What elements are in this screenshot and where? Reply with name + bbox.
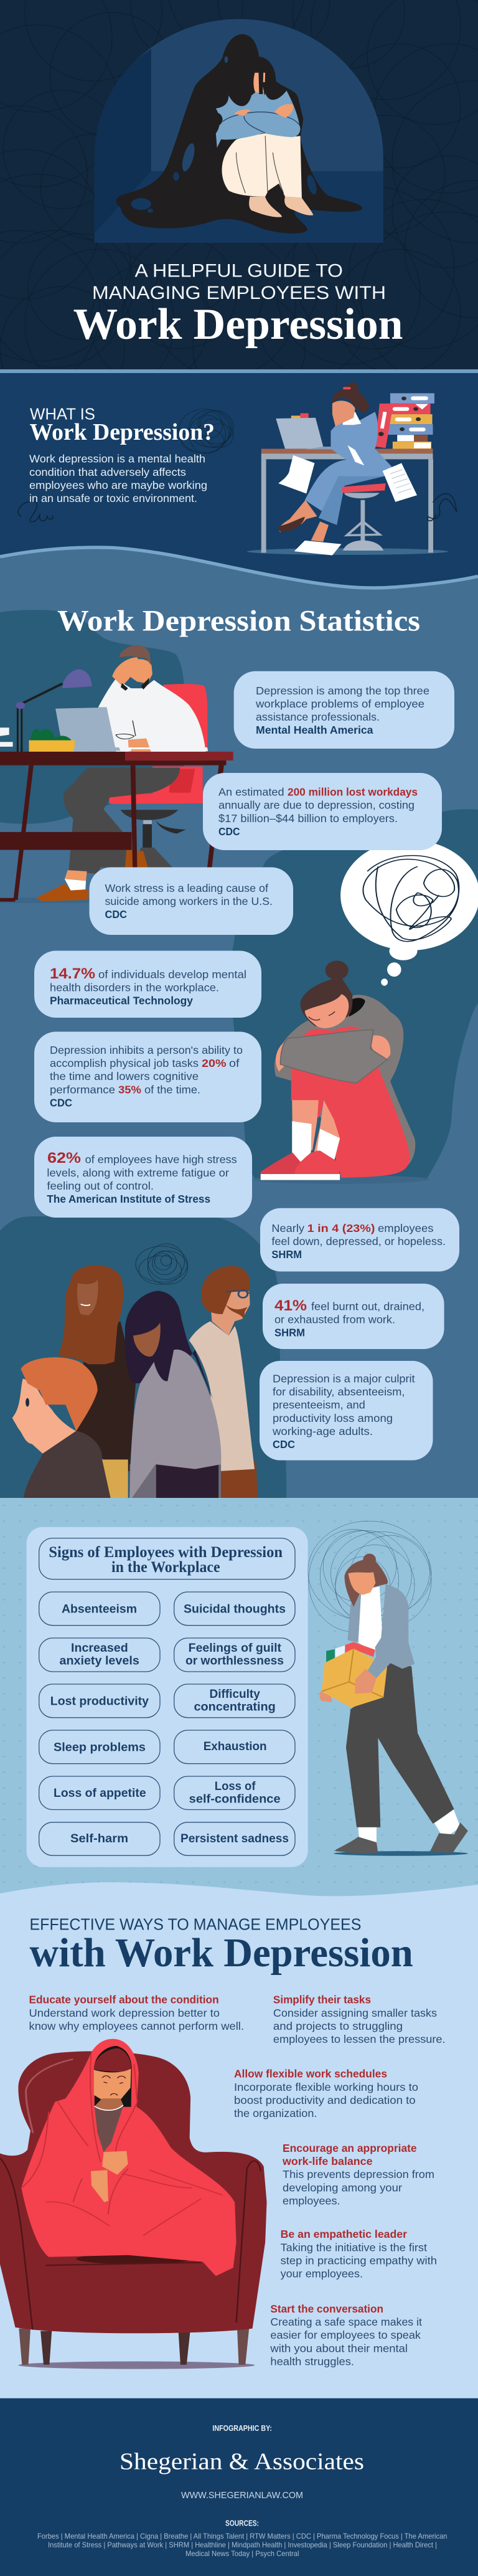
decorative scribble lines [0, 0, 478, 411]
tip: flexible schedules: Allow flexible work schedules [234, 2068, 387, 2080]
sources list [37, 2532, 447, 2558]
tip: work-life balance: employees. [283, 2195, 340, 2207]
tip: simplify: and projects to struggling [273, 2020, 403, 2032]
card: lost workdays: $17 billion–$44 billion to employers. [218, 812, 398, 825]
card: suicide: suicide among workers in the U.S. [105, 895, 273, 907]
socks [292, 1121, 340, 1162]
thought bubble [340, 840, 478, 986]
sign: Difficulty concentrating: Difficulty [209, 1688, 260, 1701]
sign: Suicidal thoughts: Suicidal thoughts [184, 1603, 286, 1616]
hands [276, 1035, 390, 1071]
company name: Shegerian & Associates [120, 2448, 364, 2474]
what-is body text: condition that adversely affects [29, 466, 186, 478]
sign: Loss of self-confidence: Loss of [215, 1780, 256, 1793]
holes in shadow [131, 56, 319, 213]
chair highlight and seams [0, 2059, 261, 2330]
hood interior [95, 2046, 132, 2107]
floor shadow [334, 1851, 468, 1856]
desk [0, 752, 233, 902]
card: 41 percent [263, 1284, 444, 1349]
checklist heading [39, 1538, 295, 1579]
front foot [36, 870, 88, 901]
hoodie [274, 995, 415, 1177]
illustration: woman with thought bubble [253, 840, 478, 1184]
tip: empathetic leader: Taking the initiative is the first [281, 2241, 427, 2253]
sign: Loss of appetite [39, 1776, 160, 1810]
plant [29, 729, 75, 764]
card: lost workdays: CDC [218, 825, 240, 838]
trousers [346, 1662, 454, 1827]
card: major culprit: productivity loss among [273, 1412, 393, 1424]
card: 41 percent: feel burnt out, drained, [311, 1300, 424, 1313]
scribble low left [18, 501, 53, 522]
knees [303, 1026, 360, 1037]
sign: Persistent sadness: Persistent sadness [180, 1832, 289, 1845]
hands [319, 1669, 377, 1702]
card: suicide [90, 867, 293, 935]
card: job tasks: Depression inhibits a person's ability to [50, 1044, 243, 1056]
pants yellow [101, 1459, 128, 1501]
hero title [73, 261, 403, 349]
sign: Loss of self-confidence [174, 1776, 295, 1810]
hands [91, 2151, 128, 2202]
cardigan [347, 1584, 415, 1671]
blanket folds [21, 2052, 223, 2235]
illustration: person in blanket on armchair [0, 2039, 267, 2369]
hood inside [349, 998, 365, 1016]
floor [95, 171, 383, 243]
card: 14.7 percent: health disorders in the workplace. [50, 982, 219, 994]
tip: start the conversation: health struggles. [270, 2356, 354, 2368]
card: job tasks: CDC [50, 1096, 72, 1109]
tip: flexible schedules [234, 2068, 418, 2119]
tip: educate: Understand work depression better to [29, 2007, 220, 2019]
card: 1 in 4: feel down, depressed, or hopeless. [271, 1235, 446, 1248]
sign: Loss of appetite: Loss of appetite [54, 1787, 146, 1800]
sign: Self-harm [39, 1822, 160, 1855]
infographic by label: INFOGRAPHIC BY: [212, 2424, 272, 2433]
sign: Increased anxiety levels: anxiety levels [60, 1654, 139, 1668]
card: 62 percent: feeling out of control. [47, 1180, 154, 1192]
sign: Sleep problems: Sleep problems [54, 1741, 146, 1754]
sign: Increased anxiety levels: Increased [71, 1642, 128, 1655]
sign: Persistent sadness [174, 1822, 295, 1855]
card: 14.7 percent: Pharmaceutical Technology [50, 994, 193, 1006]
card: top three problems [234, 671, 454, 749]
hair strand [258, 70, 268, 95]
card: lost workdays: 200 million lost workdays [288, 786, 418, 798]
floating papers [278, 455, 417, 556]
panel: what is work depression [0, 373, 478, 597]
right man [189, 1266, 258, 1500]
tip: start the conversation: Creating a safe space makes it [270, 2316, 422, 2328]
scribble near heading [179, 409, 233, 453]
tip: start the conversation: with you about their mental [269, 2342, 408, 2354]
card: 14.7 percent [34, 950, 261, 1018]
card: major culprit: working-age adults. [272, 1425, 373, 1437]
sign: Difficulty concentrating: concentrating [194, 1700, 276, 1713]
trousers [63, 768, 180, 874]
tip: start the conversation [269, 2303, 422, 2368]
sign: Lost productivity: Lost productivity [50, 1695, 149, 1708]
desk [261, 449, 433, 552]
card: 62 percent: 62% [47, 1150, 81, 1167]
hands [234, 104, 293, 118]
shoes [261, 1151, 340, 1180]
shirt [98, 679, 207, 765]
card: job tasks: of the time. [144, 1083, 200, 1096]
laptop [276, 414, 346, 450]
checklist card [27, 1527, 308, 1867]
sources label: SOURCES: [225, 2519, 259, 2527]
card: 41 percent: 41% [274, 1297, 307, 1314]
feet [249, 197, 314, 217]
legs [292, 1100, 340, 1160]
what-is heading [30, 405, 215, 445]
tip: empathetic leader [281, 2228, 437, 2280]
hero title: MANAGING EMPLOYEES WITH [92, 283, 386, 303]
tip: work-life balance: work-life balance [282, 2155, 373, 2167]
sources list: Institute of Stress | Pathways at Work | SHRM | Healthline | Mindpath Health | Investopedia | Sleep Foundation | Health Direct | [48, 2540, 437, 2549]
panel: signs of depression [0, 1498, 478, 1909]
card: job tasks [34, 1031, 261, 1122]
neck and shirt [95, 2098, 123, 2152]
card: 14.7 percent: of individuals develop mental [98, 968, 246, 980]
scribble circles [308, 1521, 431, 1632]
card: lost workdays: An estimated [218, 786, 284, 798]
scribble right [428, 494, 457, 521]
tip: flexible schedules: boost productivity and dedication to [234, 2094, 416, 2106]
hair [119, 645, 151, 666]
lower body [0, 747, 233, 902]
tip: work-life balance: Encourage an appropriate [283, 2142, 417, 2154]
illustration: woman carrying box [308, 1521, 468, 1856]
card: major culprit: CDC [273, 1438, 295, 1451]
feet [335, 1809, 468, 1854]
card: job tasks: 35% [118, 1083, 141, 1096]
front man [12, 1357, 111, 1501]
scribble above heads [136, 1244, 187, 1284]
tip: educate [29, 1994, 244, 2032]
dark blobs [0, 610, 478, 1498]
scribble in bubble [363, 856, 459, 942]
sign: Absenteeism: Absenteeism [62, 1603, 137, 1616]
papers [0, 727, 13, 747]
floor shadow [253, 1175, 430, 1184]
section heading: with Work Depression [30, 1930, 413, 1976]
chair base [120, 810, 186, 867]
shadow hands [207, 91, 298, 126]
tip: simplify: Simplify their tasks [273, 1994, 371, 2006]
card: 1 in 4 [260, 1208, 459, 1272]
left wall [95, 49, 151, 234]
panel: footer [0, 2398, 478, 2576]
arm [366, 1609, 408, 1680]
card: major culprit: Depression is a major culprit [273, 1372, 415, 1385]
forearm hand and glasses [128, 739, 156, 765]
card: 62 percent: The American Institute of Stress [47, 1193, 210, 1205]
panel: hero [0, 0, 478, 411]
arm lines [223, 112, 300, 133]
tip: flexible schedules: the organization. [234, 2107, 317, 2119]
tip: educate: Educate yourself about the condition [29, 1994, 219, 2006]
woman [278, 382, 391, 542]
eyes [309, 1011, 335, 1020]
card: job tasks: performance [50, 1083, 115, 1096]
bun and hair [300, 961, 352, 1026]
hero title: Work Depression [73, 300, 403, 349]
stats heading: Work Depression Statistics [57, 604, 420, 638]
card: job tasks: of [229, 1057, 240, 1069]
sign: Lost productivity [39, 1684, 160, 1718]
panel: statistics [0, 547, 478, 1518]
sweater [216, 90, 300, 148]
panel: effective ways [0, 1882, 478, 2422]
tip: simplify: Consider assigning smaller tasks [273, 2007, 437, 2019]
what-is body text: employees who are maybe working [29, 479, 207, 491]
sources list: Forbes | Mental Health America | Cigna | Breathe | All Things Talent | RTW Matters | CDC | Pharma Technology Focus | The American [37, 2532, 447, 2540]
checklist heading: in the Workplace [111, 1559, 220, 1576]
tip: work-life balance [282, 2142, 434, 2207]
chair back [163, 684, 207, 765]
face [94, 2068, 131, 2101]
face [253, 73, 265, 92]
tip: educate: know why employees cannot perform well. [29, 2020, 244, 2032]
card: 41 percent: SHRM [274, 1327, 305, 1339]
card: major culprit [260, 1361, 433, 1461]
tip: empathetic leader: your employees. [281, 2267, 363, 2280]
sign: Exhaustion [174, 1730, 295, 1764]
sign: Sleep problems [39, 1730, 160, 1764]
card: major culprit: for disability, absenteeism, [273, 1385, 405, 1398]
sign: Feelings of guilt [174, 1638, 295, 1672]
illustration: stressed woman at desk [18, 382, 457, 556]
facial features [102, 2076, 126, 2095]
stool [342, 483, 386, 551]
hair [94, 2048, 131, 2072]
cuff and collar [121, 678, 149, 691]
tip: simplify [273, 1994, 446, 2045]
card: suicide: Work stress is a leading cause of [105, 882, 268, 894]
sign: Feelings of guilt: Feelings of guilt [189, 1642, 282, 1655]
lamp [16, 670, 92, 765]
legs [222, 133, 302, 198]
folded arm [281, 1030, 387, 1083]
card: 62 percent: levels, along with extreme fatigue or [47, 1167, 229, 1179]
card: lost workdays: annually are due to depression, costing [218, 799, 415, 812]
sources list: Medical News Today | Psych Central [185, 2549, 299, 2558]
dress [291, 1067, 410, 1178]
tip: empathetic leader: Be an empathetic leader [281, 2228, 407, 2240]
card: 62 percent: of employees have high stress [85, 1153, 237, 1166]
tip: simplify: employees to lessen the pressure. [273, 2033, 446, 2045]
arch alcove [95, 19, 383, 243]
hero title: A HELPFUL GUIDE TO [134, 261, 343, 282]
chair shadow [18, 2361, 255, 2369]
wavy background [0, 1882, 478, 2422]
what-is body text: Work depression is a mental health [29, 453, 205, 465]
card: 41 percent: or exhausted from work. [274, 1313, 395, 1325]
checklist heading: Signs of Employees with Depression [49, 1544, 283, 1561]
sign: Exhaustion: Exhaustion [204, 1740, 267, 1753]
card: major culprit: presenteeism, and [273, 1399, 365, 1411]
card: 14.7 percent: 14.7% [50, 965, 95, 982]
face [123, 659, 152, 684]
box [322, 1649, 387, 1708]
strip under hero [0, 369, 478, 373]
card: suicide: CDC [105, 908, 127, 921]
sign: Self-harm: Self-harm [70, 1832, 128, 1845]
card: 1 in 4: 1 in 4 (23%) [307, 1222, 375, 1234]
illustration: group of sad coworkers [12, 1244, 258, 1501]
card: lost workdays [203, 773, 442, 850]
white shirt bottom [118, 747, 208, 751]
lamp base [17, 747, 22, 752]
sign: Suicidal thoughts [174, 1592, 295, 1626]
left woman [58, 1265, 136, 1472]
sign: Feelings of guilt: or worthlessness [185, 1654, 284, 1668]
blanket [21, 2039, 237, 2276]
card: top three problems: Mental Health America [256, 724, 373, 736]
illustration: man at desk [0, 645, 233, 902]
card: top three problems: assistance professionals. [256, 711, 380, 723]
white top [358, 1586, 383, 1652]
what-is heading: WHAT IS [30, 405, 95, 424]
leg creases [237, 136, 284, 193]
tip: work-life balance: developing among your [283, 2182, 402, 2194]
chair seat [109, 767, 203, 804]
sign: Difficulty concentrating [174, 1684, 295, 1718]
sign: Loss of self-confidence: self-confidence [189, 1792, 281, 1806]
what-is body text: in an unsafe or toxic environment. [29, 492, 197, 504]
chair body [0, 2051, 267, 2333]
floor shadow under desk [0, 897, 93, 903]
box contents [326, 1642, 375, 1663]
card: top three problems: Depression is among the top three [256, 684, 429, 697]
what-is body text [29, 453, 207, 504]
card: job tasks: 20% [202, 1057, 227, 1069]
hair [344, 1554, 388, 1607]
card: top three problems: workplace problems of employee [255, 698, 424, 710]
website: WWW.SHEGERIANLAW.COM [181, 2490, 303, 2501]
tip: start the conversation: Start the conversation [270, 2303, 383, 2315]
upper body [0, 645, 207, 765]
card: 62 percent [34, 1137, 252, 1218]
card: 1 in 4: employees [378, 1222, 434, 1234]
hand on forehead [112, 657, 139, 686]
second shoe [125, 850, 148, 867]
card: 1 in 4: SHRM [271, 1248, 302, 1261]
binders [375, 393, 434, 449]
section background wave [0, 547, 478, 1518]
tip: empathetic leader: step in practicing empathy with [281, 2255, 437, 2267]
card: job tasks: accomplish physical job tasks [50, 1057, 199, 1069]
lap shadow [45, 2253, 201, 2265]
tip: start the conversation: easier for employees to speak [270, 2329, 421, 2341]
what-is heading: Work Depression? [30, 419, 215, 445]
sign: Absenteeism [39, 1592, 160, 1626]
face [348, 1572, 375, 1595]
card: 1 in 4: Nearly [271, 1222, 304, 1234]
face [305, 994, 349, 1028]
sign: Increased anxiety levels [39, 1638, 160, 1672]
center woman [125, 1290, 221, 1501]
section heading: EFFECTIVE WAYS TO MANAGE EMPLOYEES [30, 1915, 361, 1933]
laptop [55, 708, 119, 765]
laptop bottom and pot [73, 747, 120, 751]
tip: flexible schedules: Incorporate flexible working hours to [234, 2081, 418, 2093]
illustration: arch with woman and shadow [95, 19, 383, 243]
dark shadow figure [116, 34, 362, 234]
tip: work-life balance: This prevents depression from [283, 2168, 434, 2181]
chair legs [19, 2329, 249, 2365]
card: job tasks: the time and lowers cognitive [50, 1070, 199, 1082]
paper lines [390, 470, 411, 493]
